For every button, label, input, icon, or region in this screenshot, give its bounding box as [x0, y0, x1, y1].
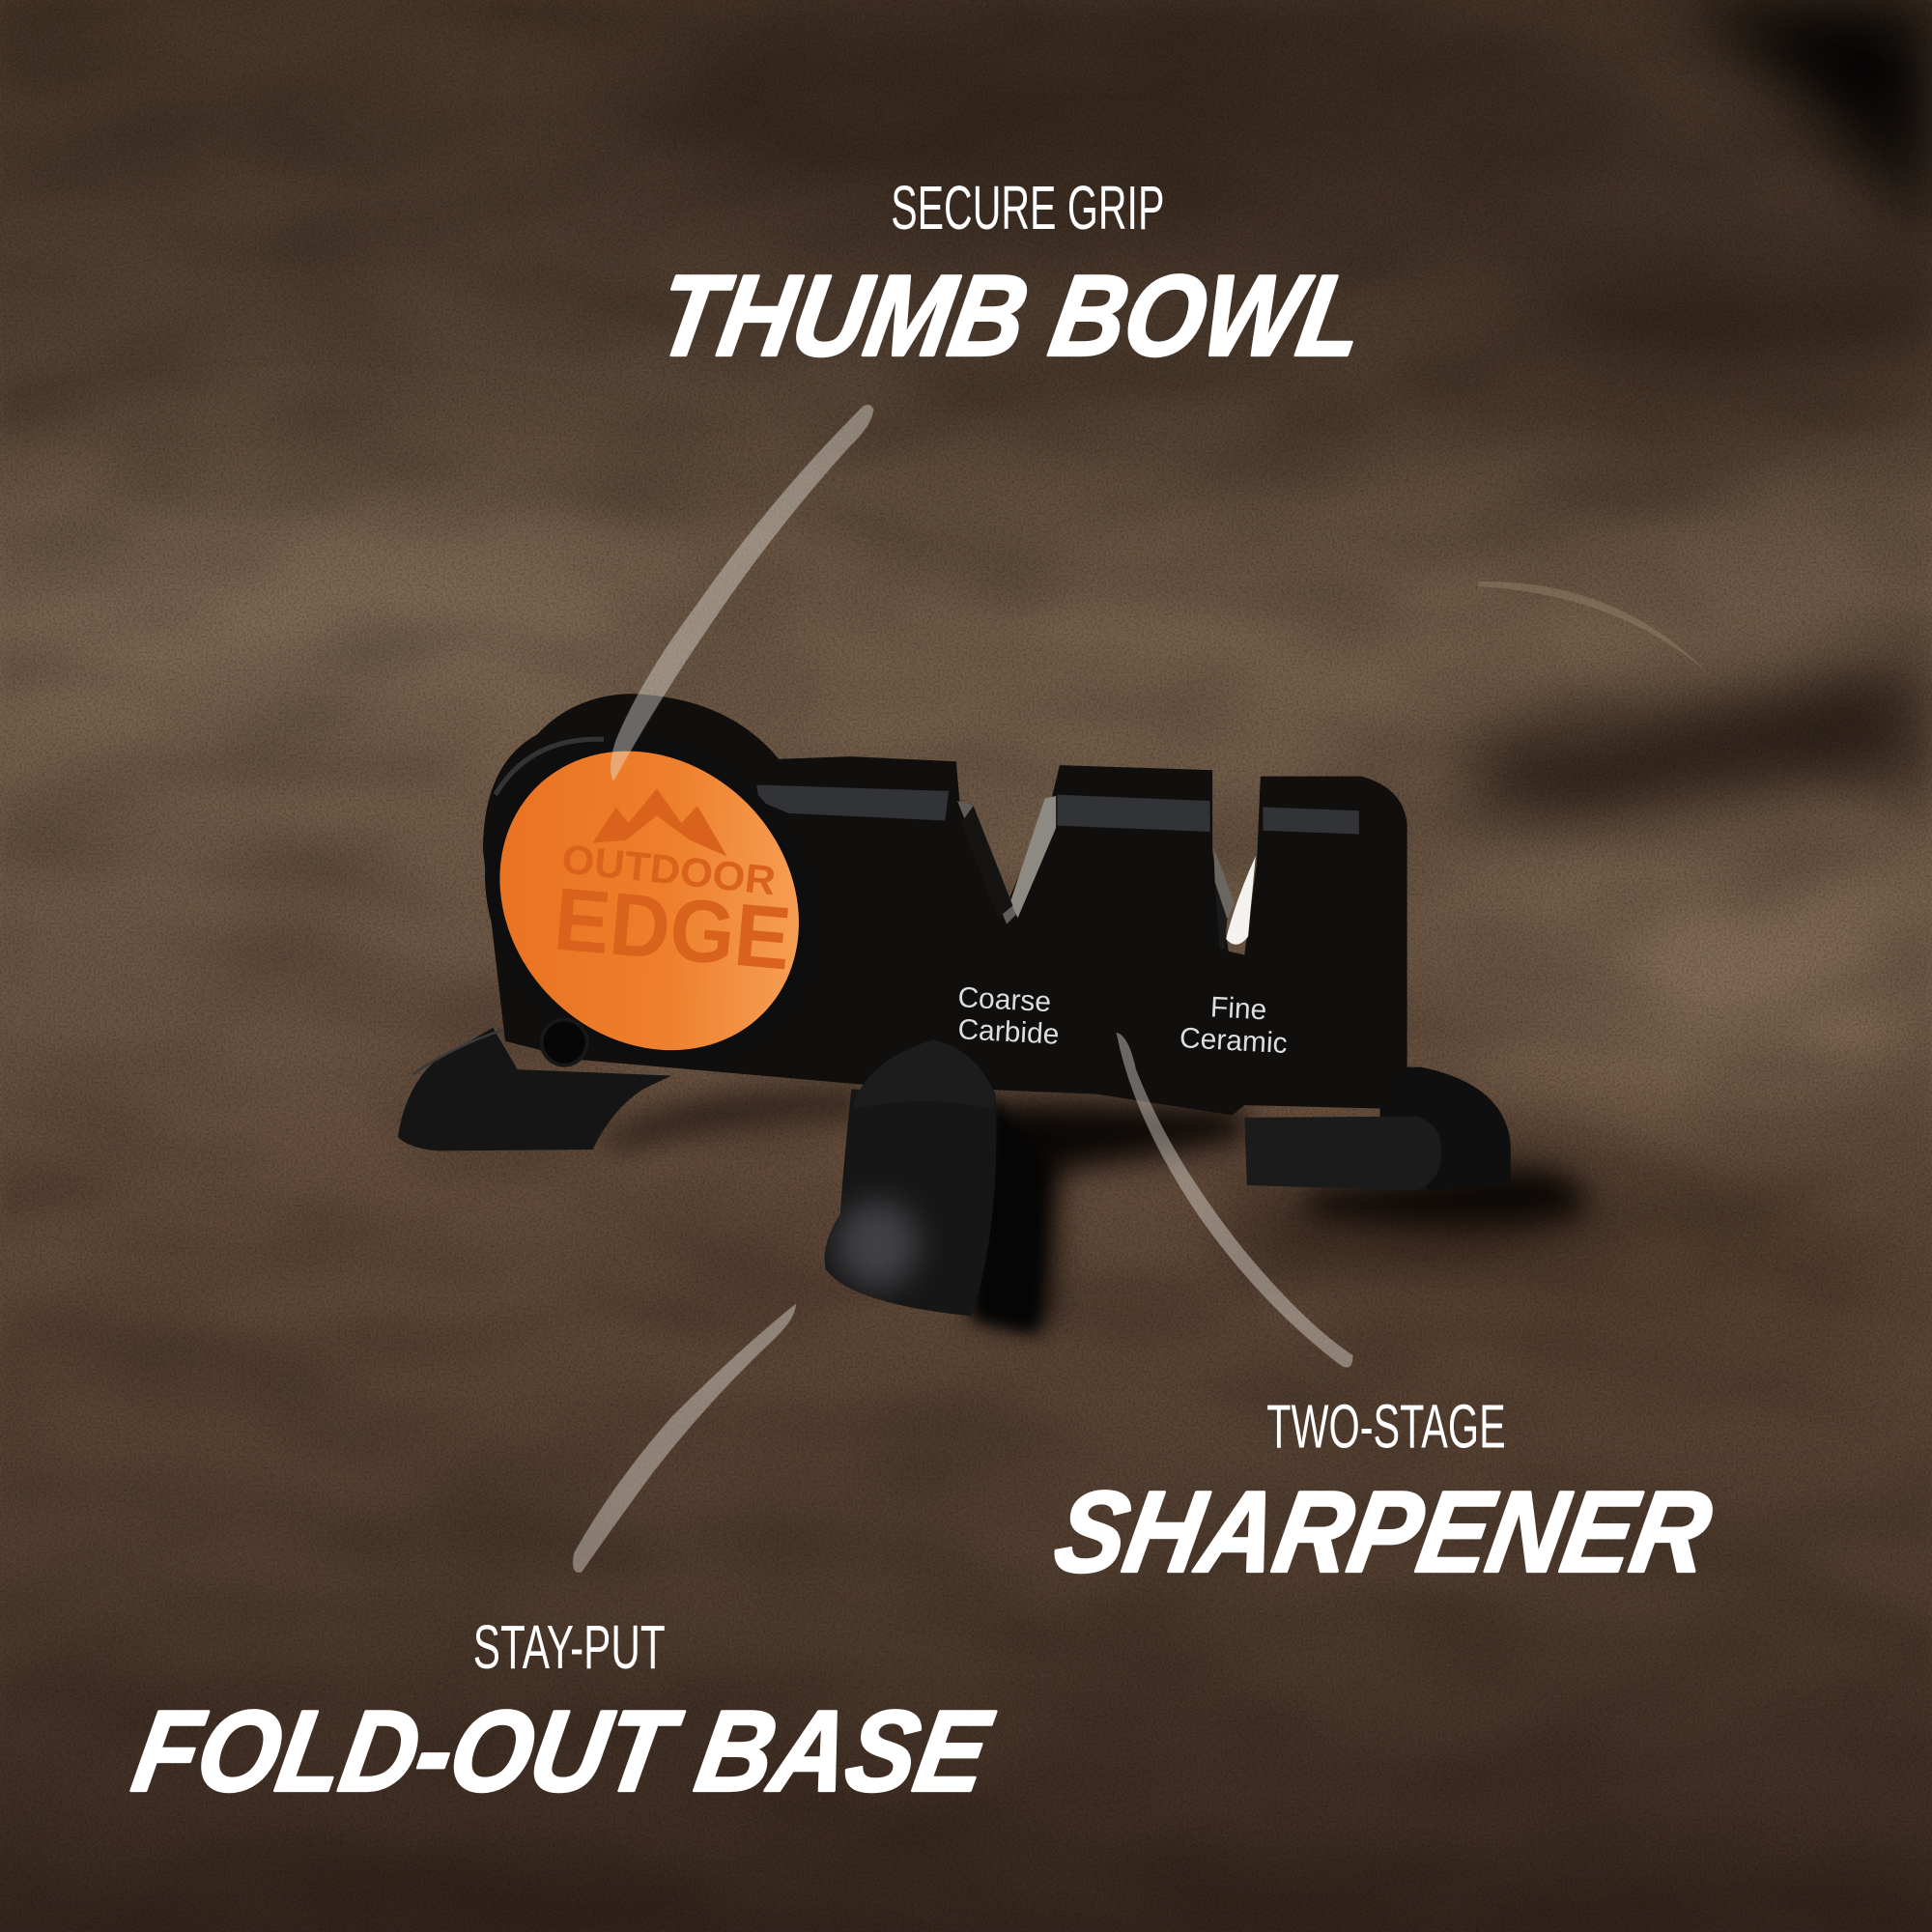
callout: fold-out base — [125, 1612, 1001, 1815]
printed stage labels: Fine — [1209, 991, 1267, 1026]
printed stage labels — [957, 981, 1288, 1060]
left foot — [398, 1028, 671, 1151]
thumb bowl ring — [417, 668, 881, 1132]
grey bevels — [756, 784, 1359, 835]
fold-out base — [825, 1040, 1047, 1333]
ground shadow — [604, 1093, 1585, 1331]
sharpener body — [483, 694, 1407, 1115]
title: thumb bowl: THUMB BOWL — [648, 252, 1374, 380]
title: sharpener: SHARPENER — [1046, 1468, 1719, 1596]
embossed logo: EDGE — [551, 869, 795, 988]
subtitle: two-stage: TWO-STAGE — [1266, 1392, 1506, 1462]
embossed logo — [551, 788, 795, 988]
sharpening notch 1 — [957, 796, 1056, 924]
callout stroke: fold-out base — [573, 1303, 796, 1573]
embossed logo: OUTDOOR — [559, 836, 778, 903]
printed stage labels: Coarse — [957, 981, 1052, 1018]
sharpening notch 2 with ceramic rod — [1213, 848, 1256, 949]
callout stroke: sharpener — [1117, 1033, 1353, 1368]
subtitle: stay-put: STAY-PUT — [473, 1612, 666, 1682]
printed stage labels: Carbide — [957, 1013, 1060, 1051]
callout: sharpener — [1046, 1392, 1719, 1596]
product: two-stage knife sharpener — [398, 668, 1585, 1333]
orange thumb pad — [439, 690, 860, 1112]
title: fold-out base: FOLD-OUT BASE — [125, 1688, 1001, 1815]
callout stroke: thumb bowl — [611, 405, 873, 781]
callout: thumb bowl — [648, 173, 1374, 380]
right foot — [1244, 1067, 1511, 1190]
subtitle: secure grip: SECURE GRIP — [891, 173, 1164, 242]
printed stage labels: Ceramic — [1179, 1022, 1288, 1060]
